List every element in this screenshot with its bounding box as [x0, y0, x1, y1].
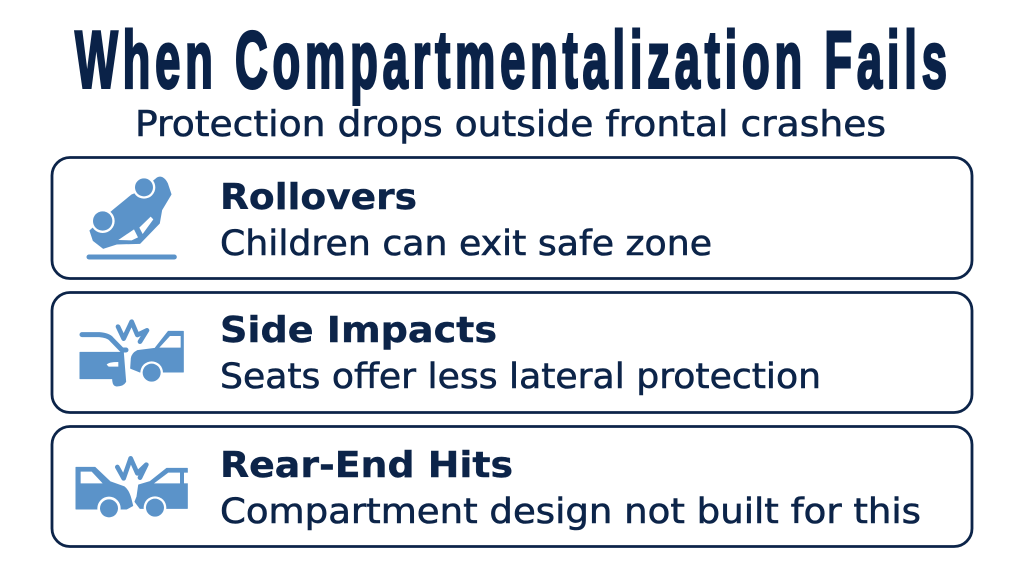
- text: rear-end hits description: Compartment design not built for this: [220, 492, 921, 532]
- icon: rear-end collision: [76, 458, 188, 520]
- panel: rear-end hits: [52, 426, 972, 546]
- heading: rollovers: Rollovers: [220, 177, 417, 218]
- text: side impacts description: Seats offer less lateral protection: [220, 357, 821, 397]
- panel: rollovers: [52, 158, 972, 278]
- icon: side collision: [80, 322, 183, 386]
- icon: overturned car: [89, 176, 174, 257]
- subtitle: Protection drops outside frontal crashes: [135, 104, 886, 145]
- heading: rear-end hits: Rear-End Hits: [220, 445, 513, 486]
- text: rollovers description: Children can exit safe zone: [220, 224, 712, 264]
- heading: side impacts: Side Impacts: [220, 310, 497, 351]
- title: When Compartmentalization Fails: [75, 15, 947, 105]
- panel: side impacts: [52, 292, 972, 412]
